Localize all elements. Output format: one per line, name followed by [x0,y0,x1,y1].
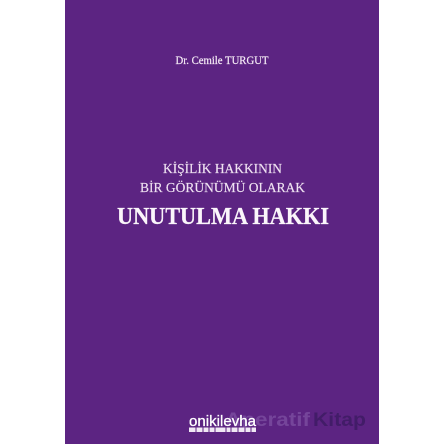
title: UNUTULMA HAKKI [117,204,329,230]
subtitle: KİŞİLİK HAKKININ [163,161,282,177]
watermark: Kitap [313,410,366,431]
subtitle: BİR GÖRÜNÜMÜ OLARAK [140,179,305,196]
publisher logo: onikilevha [189,414,257,430]
watermark [225,410,366,431]
panel: purple book cover [65,0,379,444]
watermark: Aperatif [225,410,311,431]
subtitle [140,161,305,196]
author name: Dr. Cemile TURGUT [176,55,268,67]
